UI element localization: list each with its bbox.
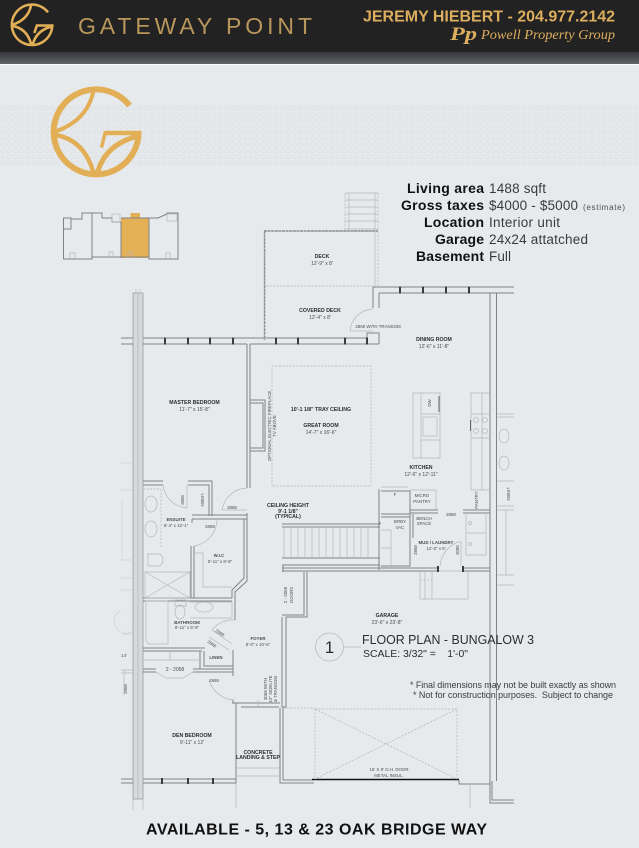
- room labels: DINING ROOM: [416, 337, 452, 343]
- room labels: 8'-11" x 5'-8": [175, 625, 200, 630]
- detail: location: [424, 214, 560, 230]
- disclaimer notes: * Final dimensions may not be built exactly as shown: [410, 680, 616, 690]
- den south wall: [121, 778, 236, 784]
- detail: living area: [407, 180, 546, 196]
- detail: gross taxes: [401, 197, 625, 213]
- header contact: JEREMY HIEBERT - 204.977.2142: [363, 8, 615, 26]
- room labels: DOORS: [289, 587, 294, 603]
- room labels: GREAT ROOM: [303, 423, 339, 429]
- bathroom, linen and foyer walls: [121, 600, 280, 808]
- key plan with highlighted unit: [64, 213, 178, 259]
- room labels: 12'-6" x 11'-8": [419, 344, 449, 350]
- room labels: LINEN: [506, 488, 511, 500]
- room labels: 14'-7" x 16'-6": [306, 430, 337, 436]
- room labels: 16' X 8' O.H. DOOR: [369, 767, 409, 772]
- detail: garage: Garage: [435, 231, 484, 247]
- room labels: 2868: [413, 545, 418, 555]
- room labels: 12'-9" x 8': [311, 261, 333, 267]
- room labels: LANDING & STEP: [236, 755, 280, 761]
- ensuite and walk-in closet: [143, 481, 247, 620]
- room labels: KITCHEN: [409, 465, 433, 471]
- room labels: 9'-1 1/8": [278, 509, 298, 515]
- deck and stairs: [264, 193, 378, 340]
- floor plan title: FLOOR PLAN - BUNGALOW 3: [362, 632, 534, 647]
- detail: living area: Living area: [407, 180, 484, 196]
- room labels: W.I.C: [214, 553, 225, 558]
- detail: gross taxes: $4000 - $5000: [489, 198, 578, 213]
- room labels: SPACE: [417, 521, 431, 526]
- room labels: 3068 WITH: [263, 678, 268, 700]
- room labels: FOYER: [250, 636, 266, 641]
- room labels: 11'-7" x 15'-8": [179, 407, 210, 413]
- room labels: 2868: [205, 524, 215, 529]
- property details: [401, 180, 625, 264]
- header company name: Powell Property Group: [480, 27, 615, 42]
- room labels: 8'-4" x 12'-1": [164, 523, 189, 528]
- room labels: 2868: [214, 628, 226, 638]
- header bar: [0, 0, 639, 65]
- room labels: METAL INSUL.: [374, 773, 404, 778]
- room labels: OPTIONAL ELECTRIC FIREPLACE: [267, 391, 272, 461]
- room labels: F: [394, 492, 397, 497]
- detail: basement: Full: [489, 249, 511, 264]
- room labels: & TRANSOM: [273, 676, 278, 702]
- stairs: [282, 492, 380, 572]
- room labels: 2868: [209, 678, 219, 683]
- room labels: BATHROOM: [174, 620, 200, 625]
- room labels: MICRO: [415, 493, 430, 498]
- room labels: 2868: [446, 512, 456, 517]
- room labels: 8'-0" x 10'-6": [246, 642, 271, 647]
- room labels: TV ABOVE: [272, 415, 277, 437]
- room labels: 23'-6" x 23'-8": [372, 620, 403, 626]
- garage: [280, 572, 490, 808]
- detail: basement: Basement: [416, 248, 484, 264]
- room labels: 12'-0" x 8': [426, 546, 446, 551]
- room labels: COVERED DECK: [299, 308, 341, 314]
- detail: garage: 24x24 attatched: [489, 232, 588, 247]
- room labels: 2868: [123, 684, 128, 694]
- room labels: ENSUITE: [166, 517, 186, 522]
- exterior walls: [121, 286, 514, 803]
- room labels: BRBY: [394, 519, 406, 524]
- detail: living area: 1488 sqft: [489, 181, 546, 196]
- room labels: 2868: [206, 639, 218, 649]
- room labels: 2868: [227, 505, 237, 510]
- room labels: PANTRY: [474, 491, 479, 509]
- floor plan scale: SCALE: 3/32" = 1'-0": [363, 648, 468, 660]
- room labels: 9'-11" x 12': [180, 740, 204, 746]
- detail: gross taxes: Gross taxes: [401, 197, 484, 213]
- room labels: PANTRY: [413, 499, 431, 504]
- icon: large Gateway Point logo: [52, 89, 142, 176]
- room labels: (TYPICAL): [275, 514, 301, 520]
- room labels: DECK: [315, 254, 330, 260]
- room labels: 14': [121, 653, 127, 658]
- room labels: VAC: [396, 525, 404, 530]
- room labels: 2080: [455, 545, 460, 555]
- room labels: 2868 WITH TRANSOM: [355, 324, 401, 329]
- room labels: 5'-11" x 8'-8": [208, 559, 233, 564]
- kitchen: [413, 393, 490, 490]
- room labels: DW: [427, 398, 432, 407]
- floor plan drawing: [114, 193, 514, 810]
- disclaimer notes: [410, 680, 616, 700]
- room labels: 2 - 2068: [166, 667, 184, 673]
- icon: small Gateway Point logo: [12, 5, 54, 46]
- great room and fireplace: [247, 344, 371, 488]
- room labels: MASTER BEDROOM: [169, 400, 220, 406]
- room labels: 10'-1 1/8" TRAY CEILING: [291, 407, 351, 413]
- room labels: CONCRETE: [243, 750, 273, 756]
- detail: location: Location: [424, 214, 484, 230]
- availability footer: AVAILABLE - 5, 13 & 23 OAK BRIDGE WAY: [146, 822, 487, 838]
- plan number marker: 1: [325, 638, 334, 657]
- room labels: MUD / LAUNDRY: [419, 540, 454, 545]
- right neighbouring vanity: [497, 414, 514, 585]
- room labels: LINEN: [200, 494, 205, 506]
- header title: GATEWAY POINT: [78, 13, 312, 39]
- plan number marker: [316, 633, 361, 661]
- room labels: 12" SIDELITE: [268, 675, 273, 703]
- icon: Powell Property Group mark: Pp: [449, 24, 477, 45]
- room labels: GARAGE: [376, 613, 399, 619]
- room labels: 2 - 2068: [283, 586, 288, 603]
- room labels: BENCH: [416, 516, 432, 521]
- detail: gross taxes: (estimate): [583, 203, 625, 212]
- room labels: 2868: [180, 495, 185, 505]
- detail: garage: [435, 231, 588, 247]
- room labels: LINEN: [209, 655, 223, 660]
- disclaimer notes: * Not for construction purposes. Subject to change: [413, 690, 613, 700]
- room labels: 12'-4" x 8': [309, 315, 331, 321]
- room labels: 12'-6" x 12'-11": [404, 472, 438, 478]
- room labels: DEN BEDROOM: [172, 733, 212, 739]
- room labels: CEILING HEIGHT: [267, 503, 310, 509]
- room labels: [121, 254, 511, 778]
- left foundation column: [114, 289, 143, 810]
- detail: location: Interior unit: [489, 215, 560, 230]
- pantry and mud laundry: [282, 487, 490, 599]
